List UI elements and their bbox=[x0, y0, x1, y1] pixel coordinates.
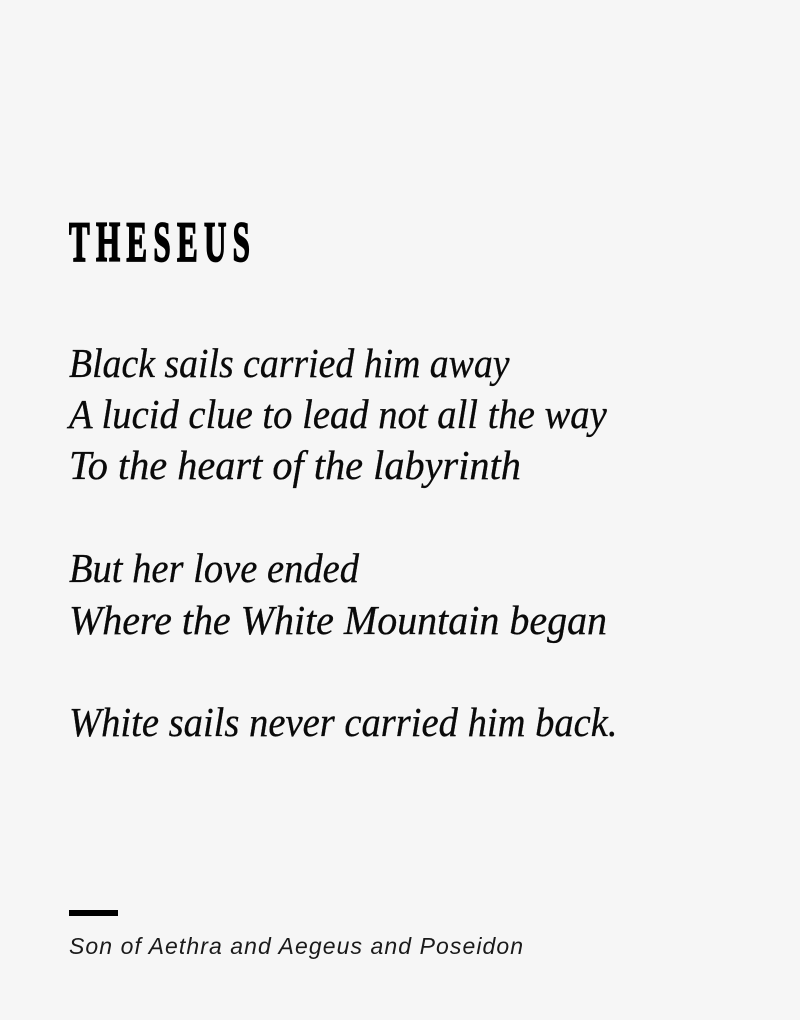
poem stanza 1 line 1: Black sails carried him away bbox=[69, 340, 509, 386]
poem stanza 1 line 2: A lucid clue to lead not all the way bbox=[69, 391, 607, 437]
poem stanza 2 line 1: But her love ended bbox=[69, 545, 359, 591]
poem stanza 2 line 2: Where the White Mountain began bbox=[69, 597, 607, 643]
accent bar bbox=[69, 910, 118, 916]
title: THESEUS bbox=[69, 211, 256, 274]
caption: Son of Aethra and Aegeus and Poseidon bbox=[69, 933, 524, 959]
poem stanza 3: White sails never carried him back. bbox=[69, 699, 618, 745]
poem stanza 1 line 3: To the heart of the labyrinth bbox=[69, 442, 521, 488]
